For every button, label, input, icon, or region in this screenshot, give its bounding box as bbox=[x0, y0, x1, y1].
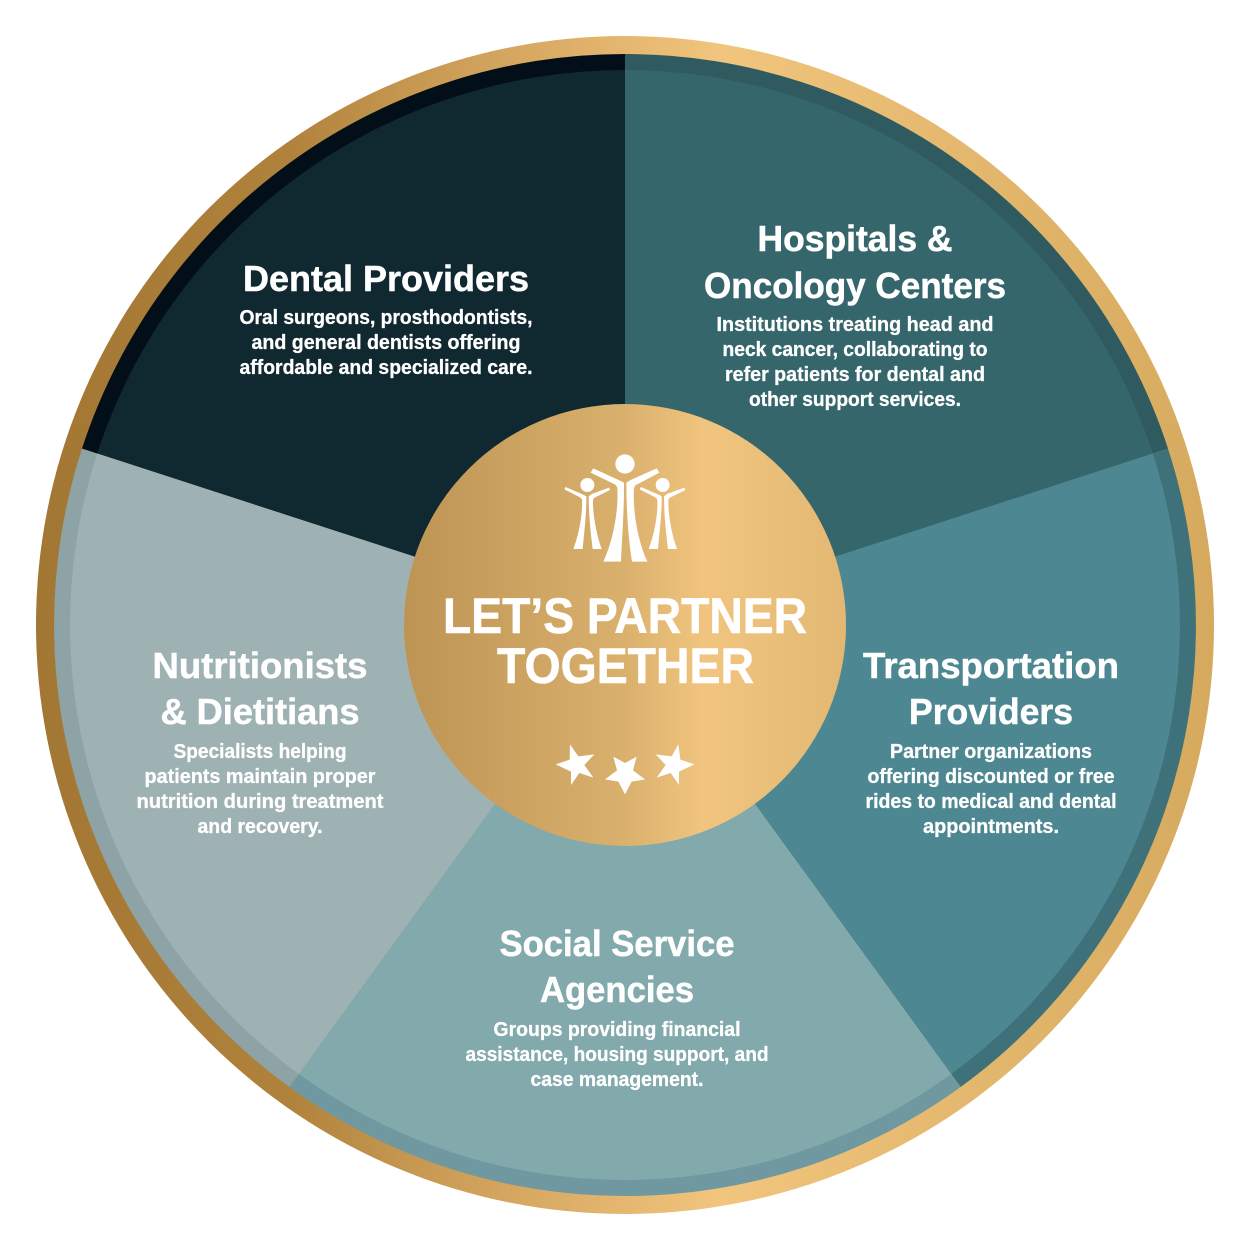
heading: social service agencies bbox=[500, 923, 734, 1010]
text: hospitals description bbox=[716, 314, 994, 411]
heading: transportation providers: Transportation bbox=[863, 645, 1119, 686]
text: nutritionists description: nutrition during treatment bbox=[136, 791, 384, 813]
heading: dental providers: Dental Providers bbox=[243, 258, 529, 299]
panel: dental providers bbox=[82, 54, 625, 625]
heading: transportation providers bbox=[863, 645, 1119, 732]
panel: nutritionists and dietitians bbox=[54, 449, 625, 1087]
heading: nutritionists and dietitians: & Dietitians bbox=[160, 691, 360, 732]
center title: LET’S PARTNER bbox=[443, 588, 807, 644]
text: social service description: Groups providing financial bbox=[494, 1019, 740, 1041]
text: transportation description bbox=[866, 741, 1116, 838]
heading: social service agencies: Social Service bbox=[500, 923, 734, 964]
text: nutritionists description: Specialists helping bbox=[174, 741, 346, 763]
center title bbox=[443, 588, 807, 694]
text: transportation description: rides to medical and dental bbox=[866, 791, 1116, 813]
icon: three people with raised arms bbox=[564, 454, 685, 562]
heading: social service agencies: Agencies bbox=[540, 969, 694, 1010]
panel: social service agencies bbox=[289, 625, 961, 1196]
text: dental providers description: Oral surgeons, prosthodontists, bbox=[240, 307, 532, 329]
text: dental providers description bbox=[240, 307, 532, 379]
text: hospitals description: refer patients for dental and bbox=[725, 364, 985, 386]
text: social service description: assistance, housing support, and bbox=[466, 1044, 768, 1066]
icon: three stars bbox=[556, 744, 694, 794]
text: dental providers description: affordable and specialized care. bbox=[240, 357, 532, 379]
text: nutritionists description: patients maintain proper bbox=[144, 766, 376, 788]
heading: transportation providers: Providers bbox=[909, 691, 1073, 732]
text: hospitals description: Institutions treating head and bbox=[716, 314, 994, 336]
text: hospitals description: neck cancer, collaborating to bbox=[722, 339, 988, 361]
heading: hospitals and oncology centers: Hospitals & bbox=[758, 218, 952, 259]
center title: TOGETHER bbox=[497, 638, 754, 694]
text: hospitals description: other support services. bbox=[749, 389, 961, 411]
panel: transportation providers bbox=[625, 449, 1196, 1087]
text: transportation description: Partner organizations bbox=[890, 741, 1092, 763]
text: nutritionists description bbox=[136, 741, 384, 838]
text: transportation description: offering discounted or free bbox=[868, 766, 1114, 788]
text: social service description: case management. bbox=[530, 1069, 704, 1091]
text: transportation description: appointments. bbox=[923, 816, 1059, 838]
heading: nutritionists and dietitians bbox=[152, 645, 368, 732]
center hub bbox=[404, 404, 846, 846]
text: nutritionists description: and recovery. bbox=[198, 816, 322, 838]
heading: hospitals and oncology centers: Oncology Centers bbox=[704, 265, 1006, 306]
heading: hospitals and oncology centers bbox=[704, 218, 1006, 306]
text: dental providers description: and general dentists offering bbox=[252, 332, 520, 354]
panel: hospitals and oncology centers bbox=[625, 54, 1168, 625]
heading: nutritionists and dietitians: Nutritionists bbox=[152, 645, 368, 686]
text: social service description bbox=[466, 1019, 768, 1091]
